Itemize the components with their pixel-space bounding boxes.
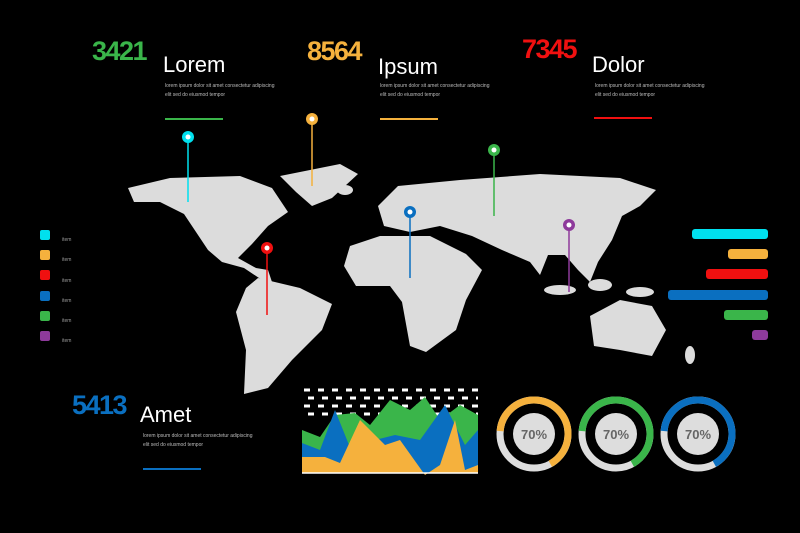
stat block: 3421 Lorem: 3421	[92, 36, 146, 66]
stat block: 5413 Amet: lorem ipsum dolor sit amet consectetur adipiscing elit sed do eiusmod tempor	[143, 433, 252, 448]
pin: cyan	[182, 131, 194, 202]
area chart	[302, 388, 478, 475]
stat block: 7345 Dolor: 7345	[522, 34, 576, 64]
legend: item	[62, 257, 71, 263]
legend: item	[62, 278, 71, 284]
stat block: 8564 Ipsum	[307, 36, 490, 120]
legend: item	[62, 237, 71, 243]
stat block: 7345 Dolor	[522, 34, 704, 119]
pin: green	[488, 144, 500, 216]
stat block: 5413 Amet	[72, 390, 252, 470]
donut charts	[496, 396, 736, 472]
donut charts: 70%	[685, 427, 711, 442]
stat block: 7345 Dolor: lorem ipsum dolor sit amet consectetur adipiscing elit sed do eiusmod tempor	[595, 83, 704, 98]
donut charts: 70%	[521, 427, 547, 442]
stat block: 3421 Lorem: Lorem	[163, 52, 225, 77]
stat block: 8564 Ipsum: 8564	[307, 36, 361, 66]
legend: item	[62, 298, 71, 304]
pin: orange	[306, 113, 318, 186]
legend	[40, 230, 72, 344]
pin: purple	[563, 219, 575, 292]
stat block: 3421 Lorem: lorem ipsum dolor sit amet consectetur adipiscing elit sed do eiusmod tempor	[165, 83, 274, 98]
stat block: 8564 Ipsum: Ipsum	[378, 54, 438, 79]
stat block: 5413 Amet: Amet	[140, 402, 191, 427]
legend: item	[62, 338, 71, 344]
pin: blue	[404, 206, 416, 278]
stat block: 3421 Lorem	[92, 36, 274, 120]
donut charts: 70%	[603, 427, 629, 442]
stat block: 5413 Amet: 5413	[72, 390, 126, 420]
bar chart right	[668, 229, 768, 340]
pin: red	[261, 242, 273, 315]
stat block: 7345 Dolor: Dolor	[592, 52, 645, 77]
stat block: 8564 Ipsum: lorem ipsum dolor sit amet consectetur adipiscing elit sed do eiusmod tempor	[380, 83, 490, 98]
legend: item	[62, 318, 71, 324]
